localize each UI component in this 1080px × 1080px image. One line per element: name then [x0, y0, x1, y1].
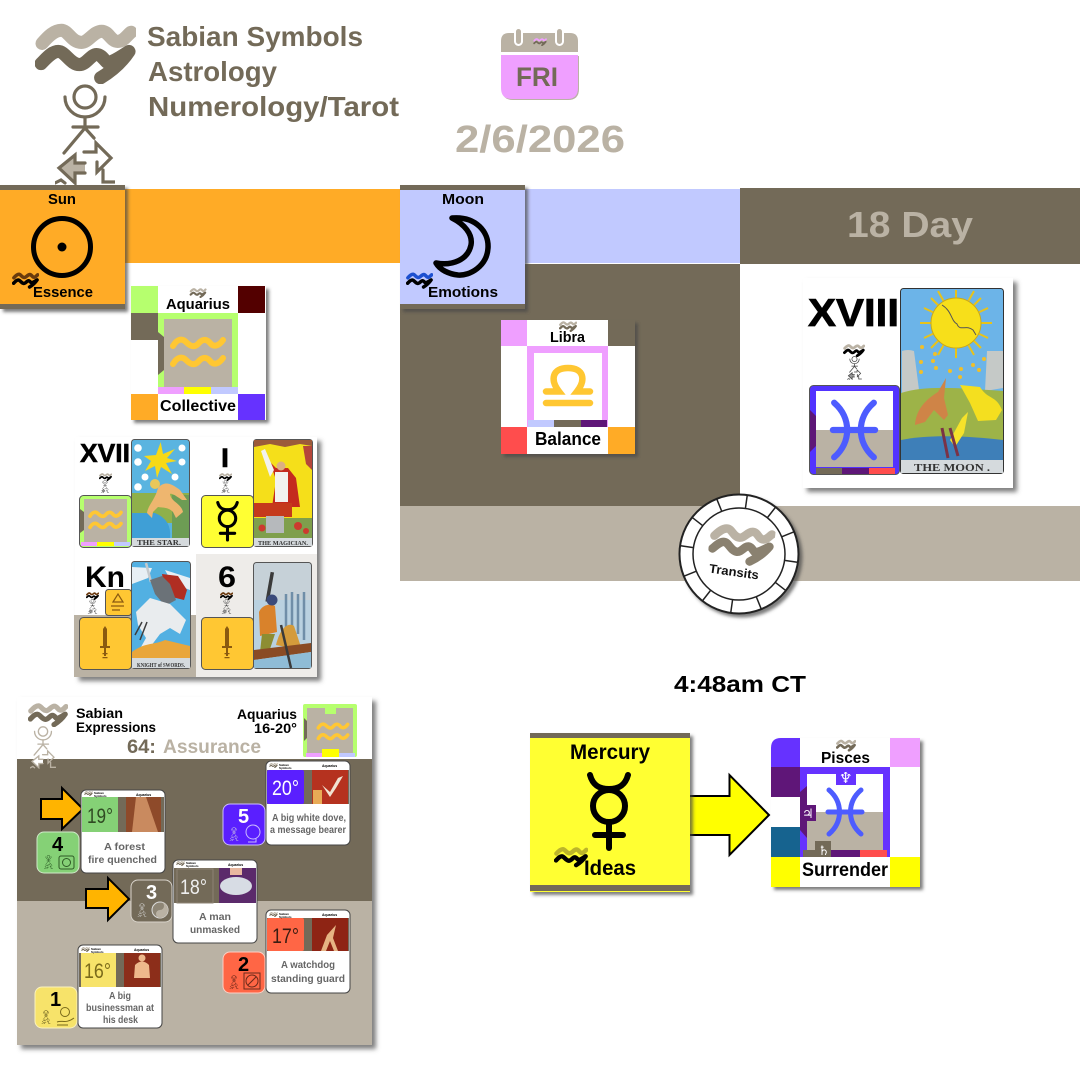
- expression card: 19 degrees: Sabian: [94, 791, 104, 795]
- number tile: 2: [223, 952, 265, 993]
- panel: Sabian Expressions: 16-20°: [254, 721, 297, 736]
- number tile: 4: [37, 832, 79, 873]
- arrow: day 19: [41, 788, 83, 829]
- panel: tarot correspondences: [74, 437, 317, 677]
- panel: Sabian Expressions: Sabian: [76, 706, 123, 721]
- card: Pisces Surrender: [771, 738, 920, 887]
- panel: The Moon tarot: XVIII: [808, 292, 899, 335]
- XVII group: [80, 438, 132, 548]
- expression card: 18 degrees: [173, 860, 257, 943]
- expression card: 19 degrees: A forest: [104, 841, 146, 853]
- number tile: 1: 1: [50, 989, 61, 1011]
- tarot card: The Magician: [254, 440, 312, 547]
- expression card: 17 degrees: A watchdog: [281, 959, 335, 971]
- expression card: 18 degrees: A man: [199, 911, 231, 923]
- panel: Sabian Expressions: 64:: [127, 737, 156, 758]
- icon: Neptune: ♆: [839, 769, 852, 787]
- XVII group: XVII: [80, 438, 130, 468]
- tarot card: Six of Swords: [254, 562, 312, 668]
- expression card: 17 degrees: [266, 910, 350, 993]
- tarot card: The Moon: [900, 288, 1004, 474]
- expression card: 20 degrees: 20°: [272, 777, 299, 800]
- number tile: 2: 2: [238, 954, 249, 976]
- band: sun: [125, 189, 400, 263]
- band: transits: [400, 506, 1080, 581]
- arrow: Mercury into Pisces: [685, 775, 769, 855]
- I group: I: [221, 443, 229, 473]
- expression card: 16 degrees: [78, 945, 162, 1028]
- panel: Sabian Expressions: [17, 697, 372, 1045]
- expression card: 20 degrees: a message bearer: [270, 825, 346, 836]
- panel: sun: Essence: [33, 284, 93, 301]
- logo: Sabian Symbols mark: [41, 30, 131, 183]
- transit time: 4:48am CT: [674, 671, 806, 697]
- card: Aquarius Collective: Collective: [160, 398, 236, 415]
- Kn group: Kn: [85, 561, 125, 594]
- number tile: 1: [35, 987, 77, 1028]
- band: day number: [740, 188, 1080, 264]
- expression card: 16 degrees: 16°: [84, 960, 111, 983]
- expression card: 18 degrees: Aquarius: [228, 863, 243, 867]
- card: Libra Balance: [501, 320, 635, 454]
- panel: Sabian Expressions: Expressions: [76, 720, 156, 735]
- icon: Jupiter: ♃: [802, 807, 814, 822]
- icon: Saturn: [815, 841, 831, 859]
- I group: [202, 443, 254, 548]
- expression card: 20 degrees: A big white dove,: [272, 813, 346, 824]
- panel: sun: Sun: [48, 191, 76, 208]
- expression card: 18 degrees: Sabian: [186, 861, 196, 865]
- transits wheel: [680, 494, 798, 614]
- title: Astrology: [148, 56, 277, 87]
- expression card: 16 degrees: Symbols: [91, 950, 104, 954]
- expression card: 19 degrees: fire quenched: [88, 854, 157, 866]
- panel: Mercury: Ideas: [584, 857, 636, 880]
- expression card: 17 degrees: Aquarius: [322, 913, 337, 917]
- panel: moon: [400, 185, 525, 309]
- 6 group: [202, 561, 254, 670]
- expression card: 16 degrees: businessman at: [86, 1002, 154, 1014]
- number tile: 5: 5: [238, 806, 249, 828]
- panel: Mercury: [530, 733, 690, 892]
- Kn group: [80, 561, 132, 670]
- card: Libra Balance: Balance: [535, 429, 601, 449]
- panel: moon sign background: [400, 264, 740, 506]
- title: Sabian Symbols: [147, 21, 363, 52]
- panel: The Moon tarot: [803, 278, 1013, 488]
- expression card: 19 degrees: 19°: [87, 805, 113, 828]
- expression card: 19 degrees: Symbols: [94, 794, 107, 798]
- expression card: 16 degrees: Aquarius: [134, 948, 149, 952]
- title: [147, 21, 399, 122]
- expression card: 19 degrees: Aquarius: [136, 793, 151, 797]
- icon: calendar day: FRI: [516, 62, 558, 92]
- expression card: 16 degrees: A big: [109, 990, 131, 1002]
- expression card: 19 degrees: [81, 790, 165, 873]
- tarot card: The Star: [132, 440, 190, 547]
- expression card: 18 degrees: unmasked: [190, 924, 240, 936]
- expression card: 16 degrees: his desk: [103, 1014, 138, 1026]
- tile: Aquarius 16-20: [303, 704, 357, 757]
- expression card: 16 degrees: Sabian: [91, 947, 101, 951]
- arrow: day 18: [86, 878, 129, 920]
- card: Libra Balance: Libra: [550, 329, 586, 346]
- title: Numerology/Tarot: [148, 91, 399, 122]
- number tile: 5: [223, 804, 265, 845]
- expression card: 20 degrees: [266, 761, 350, 845]
- expression card: 18 degrees: 18°: [180, 876, 207, 899]
- number tile: 3: 3: [146, 882, 157, 904]
- number tile: 4: 4: [52, 834, 64, 856]
- panel: sun: [0, 185, 125, 309]
- date: 2/6/2026: [455, 119, 625, 161]
- number tile: 3: [131, 880, 172, 922]
- panel: moon: Moon: [442, 191, 484, 208]
- icon: Jupiter: [800, 805, 816, 822]
- expression card: 20 degrees: Sabian: [279, 763, 289, 767]
- panel: Mercury: Mercury: [570, 741, 650, 764]
- band: day number: 18 Day: [847, 204, 973, 245]
- expression card: 17 degrees: Sabian: [279, 912, 289, 916]
- expression card: 17 degrees: 17°: [272, 925, 299, 948]
- panel: Sabian Expressions: Assurance: [163, 737, 261, 758]
- card: Pisces Surrender: Pisces: [821, 750, 870, 767]
- tile: Pisces: [810, 386, 900, 474]
- expression card: 17 degrees: standing guard: [271, 973, 345, 985]
- panel: moon: Emotions: [428, 284, 498, 301]
- tarot card: Knight of Swords: KNIGHT of SWORDS.: [137, 662, 185, 669]
- card: Aquarius Collective: Aquarius: [166, 296, 230, 313]
- transits wheel: Transits: [708, 562, 760, 582]
- 6 group: 6: [218, 561, 236, 594]
- expression card: 18 degrees: Symbols: [186, 864, 199, 868]
- icon: calendar day: [501, 28, 579, 100]
- card: Pisces Surrender: Surrender: [802, 860, 889, 881]
- expression card: 17 degrees: Symbols: [279, 915, 292, 919]
- expression card: 20 degrees: Aquarius: [322, 764, 337, 768]
- tarot card: The Moon: THE MOON .: [914, 462, 990, 474]
- tarot card: The Star: THE STAR.: [137, 539, 181, 547]
- icon: Saturn: ♄: [818, 844, 830, 859]
- band: moon: [525, 189, 740, 263]
- tarot card: Knight of Swords: [132, 562, 190, 669]
- panel: Sabian Expressions: Aquarius: [237, 707, 297, 722]
- card: Aquarius Collective: [131, 286, 266, 420]
- tarot card: The Magician: THE MAGICIAN.: [258, 540, 308, 547]
- expression card: 20 degrees: Symbols: [279, 766, 292, 770]
- icon: Neptune: [836, 767, 856, 787]
